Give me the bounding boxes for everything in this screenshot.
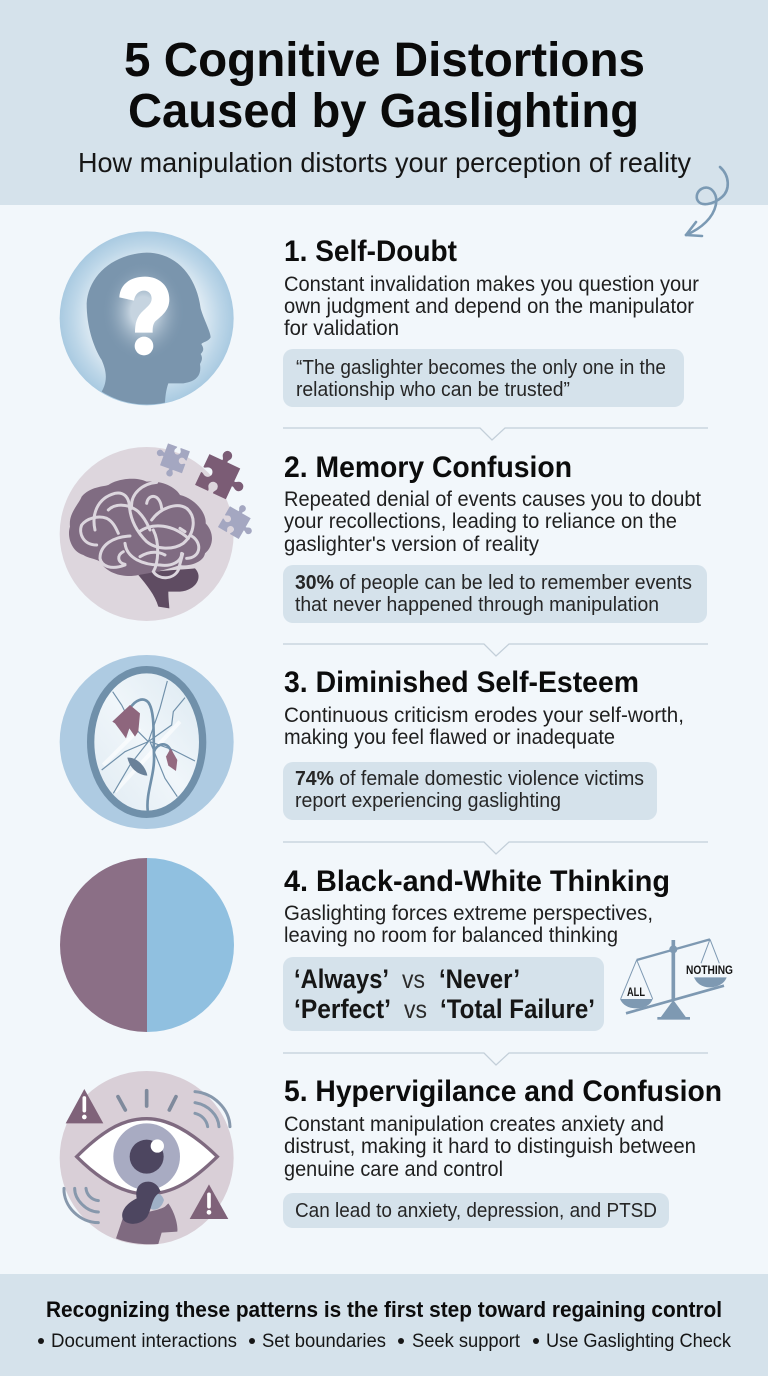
icon: curly arrow [686, 167, 728, 236]
panel: diminished self-esteem [60, 655, 684, 829]
callout: always vs never: vs [402, 966, 425, 994]
callout: always vs never: ‘Perfect’ [294, 994, 391, 1024]
icon: cracked mirror with wilted flower [60, 655, 234, 829]
callout: always vs never: vs [404, 996, 427, 1024]
description: making you feel flawed or inadequate [284, 726, 615, 749]
title: 5 Cognitive Distortions [124, 34, 645, 87]
description: Gaslighting forces extreme perspectives, [284, 902, 653, 925]
description: distrust, making it hard to distinguish between [284, 1135, 696, 1158]
footer action list: Set boundaries [262, 1331, 386, 1352]
panel: hypervigilance and confusion [60, 1071, 722, 1245]
callout: 30% statistic [283, 565, 707, 623]
heading: 2. Memory Confusion [284, 451, 572, 484]
title [124, 34, 645, 138]
title: Caused by Gaslighting [128, 85, 639, 138]
panel: memory confusion [60, 441, 707, 623]
callout: always vs never: ‘Always’ [294, 964, 389, 994]
icon: split circle [60, 858, 234, 1032]
description: own judgment and depend on the manipulator [284, 295, 694, 318]
icon: balance scale: ALL [627, 985, 645, 999]
heading: 1. Self-Doubt [284, 235, 457, 268]
subtitle: How manipulation distorts your perception of reality [78, 147, 691, 178]
description: your recollections, leading to reliance on the [284, 510, 677, 533]
callout: quote: relationship who can be trusted” [296, 379, 570, 401]
callout: always vs never [283, 957, 604, 1031]
heading: 4. Black-and-White Thinking [284, 865, 670, 898]
description: Constant invalidation makes you question your [284, 273, 699, 296]
description: leaving no room for balanced thinking [284, 924, 618, 947]
callout: quote [283, 349, 684, 407]
description: gaslighter's version of reality [284, 533, 539, 556]
description: Constant manipulation creates anxiety and [284, 1113, 664, 1136]
description: for validation [284, 317, 399, 340]
callout: quote: “The gaslighter becomes the only one in the [296, 357, 666, 379]
callout: 74% statistic: report experiencing gaslighting [295, 790, 561, 812]
description [284, 273, 699, 340]
callout: 74% statistic [283, 762, 657, 820]
description [284, 704, 684, 749]
panel: black-and-white thinking [60, 858, 733, 1032]
callout: always vs never: ‘Never’ [439, 964, 520, 994]
icon: tangled brain with puzzle pieces [60, 441, 261, 621]
footer action list: Use Gaslighting Check [546, 1331, 731, 1352]
callout: always vs never: ‘Total Failure’ [440, 994, 595, 1024]
description: Continuous criticism erodes your self-worth, [284, 704, 684, 727]
footer action list: Seek support [412, 1331, 521, 1352]
icon: watchful eye with warnings [60, 1071, 234, 1245]
heading: 3. Diminished Self-Esteem [284, 666, 639, 699]
description: genuine care and control [284, 1158, 503, 1181]
description [284, 902, 653, 947]
panel: self-doubt [60, 231, 699, 407]
callout: 30% statistic: that never happened through manipulation [295, 594, 659, 616]
icon: balance scale: NOTHING [686, 963, 733, 977]
description: Repeated denial of events causes you to doubt [284, 488, 701, 511]
footer action list [38, 1331, 731, 1352]
description [284, 488, 701, 556]
footer message: Recognizing these patterns is the first step toward regaining control [46, 1297, 722, 1322]
icon: head with question mark [60, 231, 234, 405]
heading: 5. Hypervigilance and Confusion [284, 1075, 722, 1108]
header band [0, 0, 768, 205]
icon: balance scale [620, 939, 733, 1020]
callout: outcomes [283, 1193, 669, 1228]
callout: outcomes: Can lead to anxiety, depression, and PTSD [295, 1200, 657, 1222]
callout: 74% statistic: 74% of female domestic violence victims [295, 768, 644, 790]
footer band [0, 1274, 768, 1376]
callout: 30% statistic: 30% of people can be led to remember events [295, 572, 692, 594]
footer action list: Document interactions [51, 1331, 237, 1352]
description [284, 1113, 696, 1181]
